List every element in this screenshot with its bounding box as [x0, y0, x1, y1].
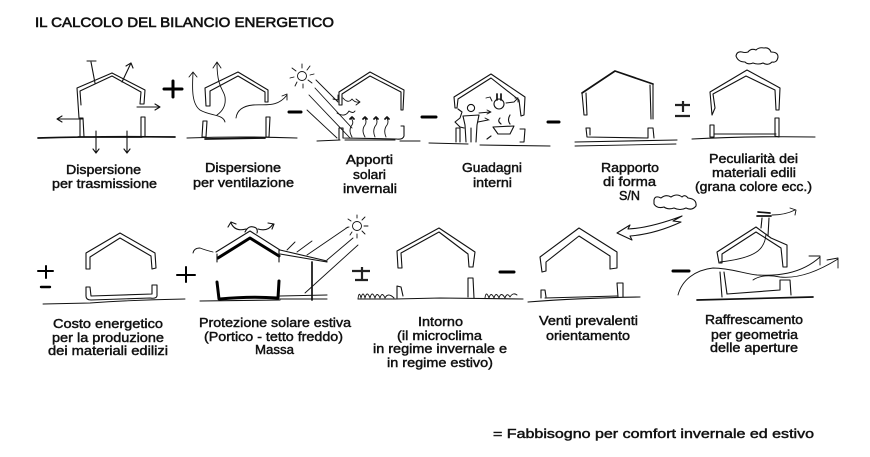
label: solari [353, 167, 386, 182]
ground line [317, 140, 420, 141]
chimney [757, 212, 771, 216]
ground line [528, 296, 640, 302]
minus sign [673, 270, 689, 272]
label: invernali [343, 181, 397, 196]
panel: rapporto di forma [575, 71, 677, 203]
label: materiali edili [712, 165, 796, 180]
heat arrows [478, 110, 491, 122]
walls and floor [217, 281, 279, 299]
panel: dispersione per trasmissione [38, 61, 175, 191]
label: Costo energetico [53, 316, 163, 331]
ground line [358, 298, 523, 299]
panel: protezione solare estiva [193, 215, 368, 357]
minus sign [289, 110, 301, 114]
label: Protezione solare estiva [199, 315, 352, 330]
house sketch [710, 70, 780, 137]
portico [280, 250, 327, 262]
label: Massa [255, 342, 295, 357]
label: per trasmissione [52, 176, 157, 191]
panel: guadagni interni [429, 74, 550, 190]
house sketch [86, 233, 157, 300]
occupants [455, 104, 479, 142]
label: orientamento [546, 328, 630, 343]
chimney arrow [772, 208, 796, 215]
label: (grana colore ecc.) [695, 179, 812, 194]
icon: small cloud [736, 48, 778, 64]
icon: wind cloud [654, 195, 696, 210]
walls and floor [720, 272, 791, 297]
label: Rapporto [601, 160, 659, 175]
label: (il microclima [397, 328, 483, 343]
solar rays [307, 80, 352, 138]
house sketch [582, 71, 653, 93]
label: Intorno [418, 314, 463, 329]
label: S/N [619, 188, 640, 203]
plus sign [177, 267, 195, 282]
plus sign [164, 81, 182, 97]
minus sign [422, 116, 436, 118]
icon: lamp [486, 94, 518, 109]
label: delle aperture [710, 340, 798, 355]
label: per geometria [711, 327, 799, 342]
icon: pot [487, 115, 514, 139]
label: Raffrescamento [705, 312, 803, 327]
ground line [200, 295, 327, 301]
conclusion text: = Fabbisogno per comfort invernale ed estivo [493, 426, 814, 441]
label: di forma [603, 174, 657, 189]
grass [358, 294, 517, 299]
roof vent [245, 227, 257, 233]
house sketch [540, 228, 623, 298]
label: Venti prevalenti [539, 313, 638, 328]
cold air curl [193, 248, 213, 253]
label: Apporti [346, 152, 393, 167]
label: in regime estivo) [387, 355, 493, 370]
wind flow [678, 234, 838, 295]
panel: dispersione per ventilazione [187, 62, 297, 190]
ground line [429, 143, 550, 146]
panel: intorno [358, 228, 523, 370]
house sketch [454, 74, 525, 142]
icon: sun [346, 215, 368, 238]
label: dei materiali edilizi [48, 343, 168, 358]
panel: raffrescamento [678, 208, 838, 355]
icon: sun [290, 64, 314, 88]
house sketch [339, 72, 404, 140]
house sketch [202, 72, 270, 137]
heavy roof [218, 238, 279, 258]
ground line [692, 137, 815, 139]
plus-minus sign [352, 267, 370, 280]
ground line [575, 140, 677, 142]
label: Guadagni [462, 160, 522, 175]
label: in regime invernale e [373, 341, 507, 356]
ground line [43, 299, 185, 304]
label: (Portico - tetto freddo) [204, 329, 343, 344]
minus sign [548, 120, 559, 124]
ground line [187, 137, 297, 138]
vent arrows [228, 222, 274, 230]
heat arrows [57, 61, 160, 153]
label: Dispersione [66, 162, 141, 177]
warm squiggles [337, 98, 388, 137]
ground line [38, 137, 175, 138]
plus-minus sign [675, 101, 690, 116]
ventilation arrows [189, 62, 287, 122]
house sketch [77, 73, 145, 137]
panel: venti prevalenti [528, 228, 640, 343]
label: Dispersione [205, 160, 281, 175]
panel: apporti solari invernali [290, 64, 420, 196]
label: Peculiarità dei [709, 151, 798, 166]
house sketch [717, 227, 787, 267]
label: per ventilazione [193, 175, 294, 190]
arrow: prevailing wind [617, 216, 682, 240]
plus-minus signs row two [38, 266, 53, 287]
panel: peculiarita dei materiali edili [692, 70, 815, 194]
title: IL CALCOLO DEL BILANCIO ENERGETICO [35, 14, 334, 30]
solar rays [287, 227, 358, 293]
label: interni [473, 175, 512, 190]
panel: costo energetico [43, 233, 185, 358]
label: per la produzione [52, 330, 164, 345]
minus sign [500, 270, 514, 274]
ground line [697, 297, 813, 300]
house sketch [397, 228, 475, 298]
